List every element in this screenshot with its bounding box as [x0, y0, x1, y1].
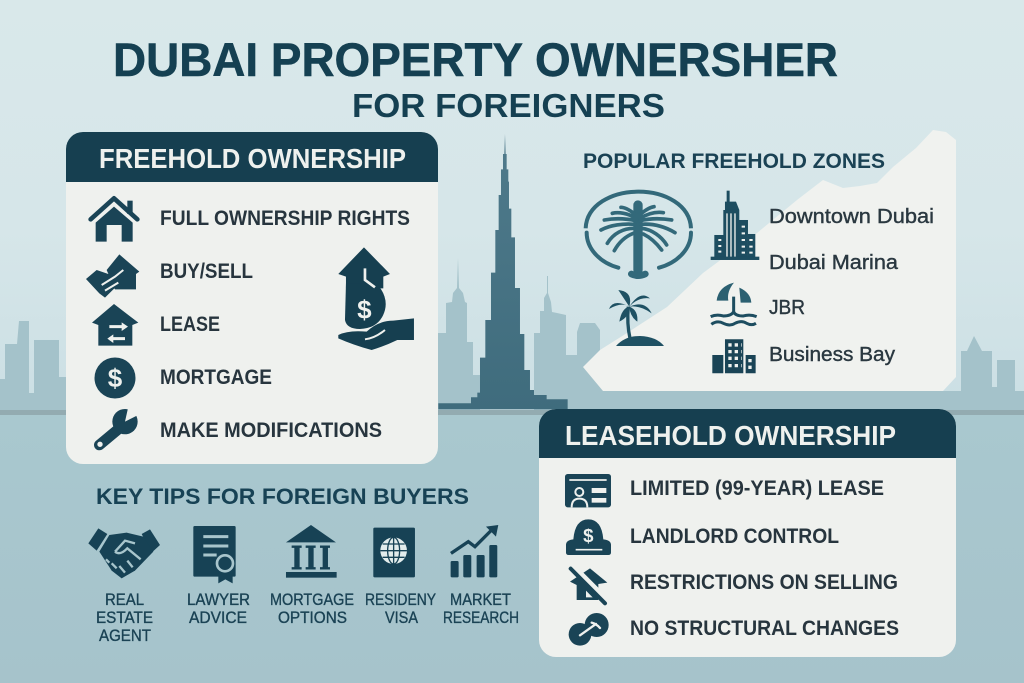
- tip label: mortgage options: OPTIONS: [278, 609, 347, 627]
- panel header: [539, 409, 956, 458]
- icon: palm jumeirah: [586, 192, 691, 276]
- zone: jbr: JBR: [769, 296, 805, 319]
- icon: house: [91, 198, 137, 242]
- panel body: [539, 409, 956, 657]
- tip label: real estate agent: AGENT: [99, 627, 151, 645]
- icon: bank: [286, 525, 337, 578]
- icon: wrench: [97, 407, 142, 447]
- zone: business bay: Business Bay: [769, 343, 896, 366]
- icon: landlord dollar dome: $: [583, 525, 594, 546]
- item: buy/sell: BUY/SELL: [160, 259, 253, 283]
- panel: freehold ownership: [66, 132, 438, 464]
- icon: mortgage dollar coin: $: [108, 363, 123, 393]
- item: mortgage: MORTGAGE: [160, 365, 272, 389]
- icon: structural key blob: [569, 613, 609, 646]
- tip label: market research: [443, 591, 519, 627]
- leasehold heading: LEASEHOLD OWNERSHIP: [565, 420, 896, 451]
- item: restrictions on selling: RESTRICTIONS ON SELLING: [630, 570, 898, 594]
- tip label: residency visa: VISA: [385, 609, 418, 627]
- title: [113, 33, 838, 124]
- tip label: lawyer advice: ADVICE: [189, 609, 247, 627]
- item: no structural changes: NO STRUCTURAL CHANGES: [630, 616, 899, 640]
- panel: popular freehold zones: [583, 130, 956, 391]
- tip label: mortgage options: MORTGAGE: [270, 591, 354, 609]
- icon: restricted house: [570, 567, 607, 603]
- icon: buy and sell handshake house: [86, 254, 139, 298]
- icon: downtown buildings: [711, 191, 759, 260]
- icon: lease house with arrows: [92, 304, 138, 346]
- panel header: [66, 132, 438, 182]
- zones background shape: [583, 130, 956, 391]
- background sky: [0, 0, 1024, 412]
- tips heading: KEY TIPS FOR FOREIGN BUYERS: [96, 484, 469, 509]
- tip label: real estate agent: ESTATE: [96, 609, 153, 627]
- title line 2: FOR FOREIGNERS: [352, 87, 665, 124]
- tip label: lawyer advice: [187, 591, 250, 627]
- icon: business bay buildings: [712, 339, 756, 373]
- icon: id card: [565, 474, 611, 507]
- tip label: real estate agent: [96, 591, 153, 645]
- icon: mortgage dollar coin: [94, 358, 136, 398]
- zones heading: POPULAR FREEHOLD ZONES: [583, 150, 885, 173]
- icon: small palm island: [609, 290, 664, 346]
- water line band: [0, 410, 1024, 415]
- icon: market chart: [451, 525, 498, 577]
- item: lease: LEASE: [160, 312, 220, 336]
- background skyline: [0, 258, 1024, 410]
- icon: money bag in hand with arrow: $: [357, 294, 372, 324]
- panel body: [66, 132, 438, 464]
- tip label: residency visa: RESIDENY: [365, 591, 436, 609]
- tip label: lawyer advice: LAWYER: [187, 591, 250, 609]
- icon: landlord dollar dome: [566, 519, 611, 555]
- icon: jbr sail and waves: [711, 283, 757, 325]
- title line 1: DUBAI PROPERTY OWNERSHER: [113, 33, 838, 86]
- panel: leasehold ownership: [539, 409, 956, 657]
- tip label: market research: MARKET: [450, 591, 511, 609]
- item: landlord control: LANDLORD CONTROL: [630, 524, 839, 548]
- tip label: real estate agent: REAL: [105, 591, 144, 609]
- icon: passport: [373, 528, 415, 577]
- tip label: market research: RESEARCH: [443, 609, 519, 627]
- section: key tips for foreign buyers: [88, 484, 519, 645]
- background water: [0, 412, 1024, 683]
- zone: dubai marina: Dubai Marina: [769, 251, 899, 274]
- icon: money bag in hand with arrow: [338, 247, 414, 350]
- burj khalifa tower: [438, 134, 568, 409]
- icon: handshake: [88, 528, 160, 578]
- item: limited lease: LIMITED (99-YEAR) LEASE: [630, 476, 884, 500]
- item: make modifications: MAKE MODIFICATIONS: [160, 418, 382, 442]
- item: full ownership rights: FULL OWNERSHIP RIGHTS: [160, 206, 410, 230]
- tip label: mortgage options: [270, 591, 354, 627]
- zone: downtown dubai: Downtown Dubai: [769, 205, 934, 228]
- freehold heading: FREEHOLD OWNERSHIP: [99, 143, 406, 174]
- tip label: residency visa: [365, 591, 436, 627]
- icon: lawyer document: [193, 526, 236, 583]
